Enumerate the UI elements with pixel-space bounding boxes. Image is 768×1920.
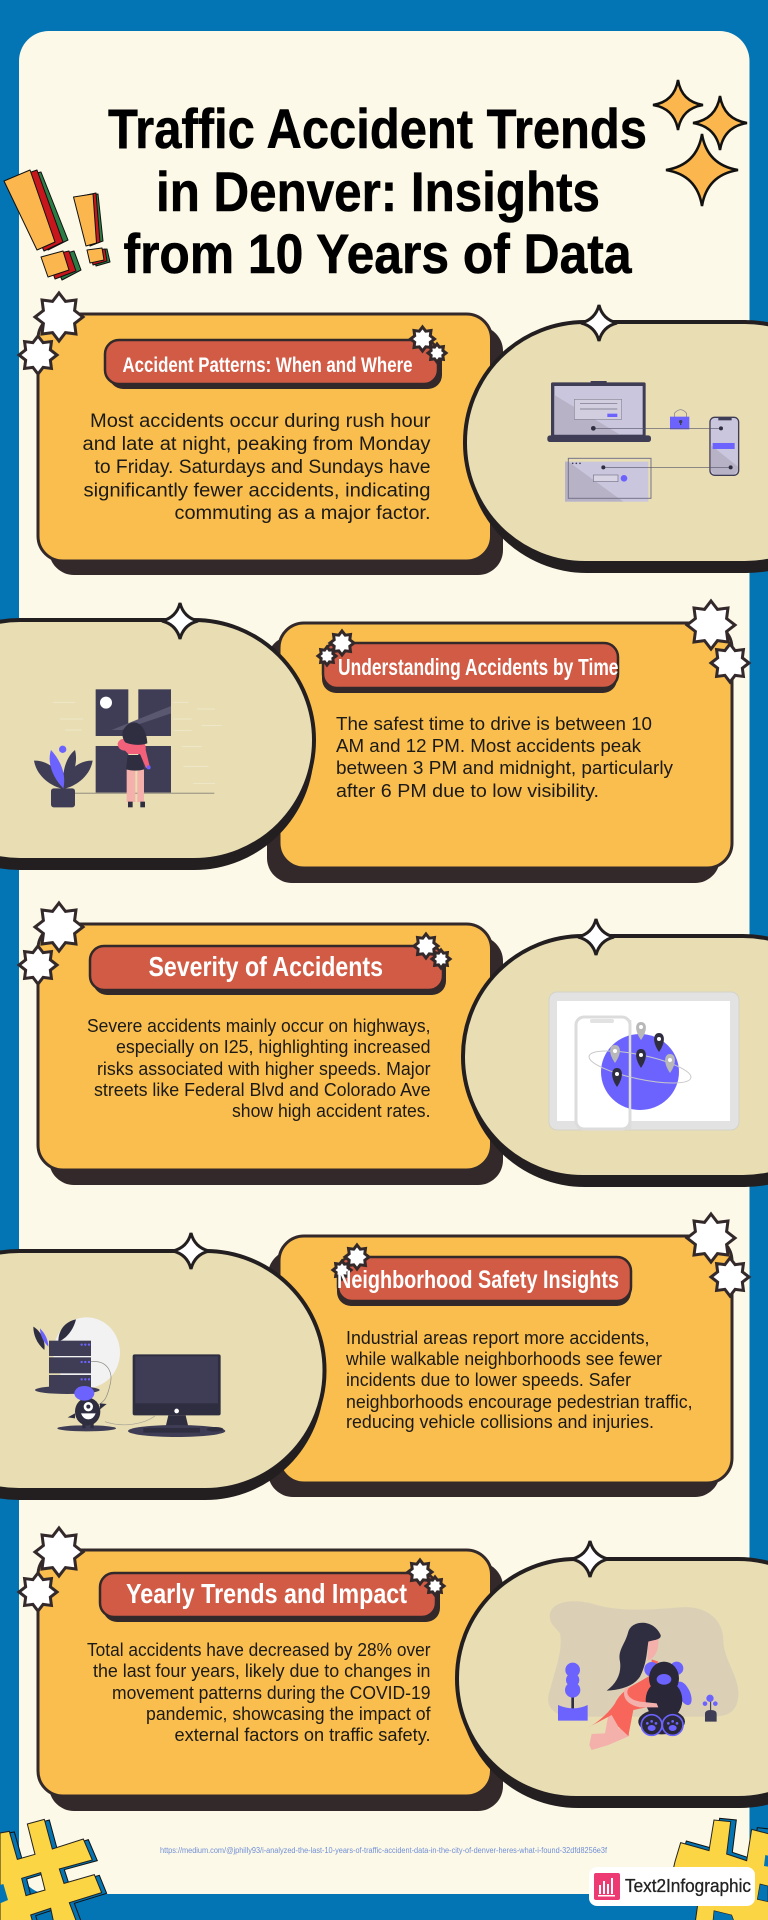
illustration: woman at window with plant [34, 689, 222, 807]
title [108, 97, 647, 285]
panel: yearly trends and impact: external factors on traffic safety. [174, 1725, 430, 1745]
illustration: devices and lock [547, 381, 739, 502]
icon: orange sparkle stars [653, 80, 747, 206]
panel: understanding accidents by time: after 6 PM due to low visibility. [336, 780, 599, 801]
panel: understanding accidents by time: Understanding Accidents by Time [338, 654, 618, 680]
panel: understanding accidents by time: The safest time to drive is between 10 [336, 713, 652, 734]
panel: accident patterns [19, 293, 768, 575]
panel: severity of accidents: Severe accidents mainly occur on highways, [87, 1016, 430, 1036]
panel: yearly trends and impact: movement patterns during the COVID-19 [112, 1683, 430, 1703]
panel: neighborhood safety insights: Neighborhood Safety Insights [337, 1266, 619, 1294]
panel: severity of accidents: risks associated with higher speeds. Major [97, 1059, 430, 1079]
panel: neighborhood safety insights: reducing vehicle collisions and injuries. [346, 1412, 654, 1432]
panel: neighborhood safety insights: incidents due to lower speeds. Safer [346, 1370, 631, 1390]
panel: severity of accidents: show high accident rates. [232, 1101, 430, 1121]
panel: accident patterns: to Friday. Saturdays and Sundays have [94, 457, 431, 478]
panel: understanding accidents by time: between 3 PM and midnight, particularly [336, 757, 674, 778]
panel: understanding accidents by time: AM and 12 PM. Most accidents peak [336, 735, 642, 756]
title: in Denver: Insights [156, 160, 600, 223]
panel: neighborhood safety insights [0, 1214, 749, 1500]
hash decoration left [0, 1819, 107, 1920]
panel: neighborhood safety insights: Industrial areas report more accidents, [346, 1328, 650, 1348]
title: from 10 Years of Data [124, 222, 632, 285]
panel: understanding accidents by time [0, 601, 749, 883]
panel: yearly trends and impact: Total accidents have decreased by 28% over [87, 1640, 431, 1660]
panel: accident patterns: Most accidents occur during rush hour [90, 411, 431, 432]
logo: Text2Infographic [589, 1867, 755, 1906]
title: Traffic Accident Trends [108, 97, 647, 160]
panel: accident patterns: Accident Patterns: When and Where [122, 354, 412, 377]
source link: https://medium.com/@jphilly93/i-analyzed-the-last-10-years-of-traffic-accident-data-in-the-city-of-denver-heres-what-i-found-32dfd8256e3f [160, 1846, 608, 1855]
panel: severity of accidents: especially on I25, highlighting increased [116, 1037, 430, 1057]
illustration: server, monitor and creature [33, 1317, 225, 1437]
panel: yearly trends and impact: Yearly Trends and Impact [126, 1578, 407, 1609]
panel: yearly trends and impact: the last four years, likely due to changes in [93, 1661, 430, 1681]
icon: exclamation marks [4, 170, 110, 280]
hash decoration right [670, 1818, 768, 1920]
panel: severity of accidents: streets like Federal Blvd and Colorado Ave [94, 1080, 430, 1100]
panel: yearly trends and impact: pandemic, showcasing the impact of [146, 1704, 431, 1724]
illustration: tablet, phone and globe with pins [549, 992, 739, 1130]
panel: accident patterns: significantly fewer accidents, indicating [84, 480, 430, 502]
panel: yearly trends and impact [19, 1528, 768, 1811]
panel: accident patterns: and late at night, peaking from Monday [82, 434, 431, 455]
logo: Text2Infographic: Text2Infographic [625, 1876, 751, 1896]
panel: severity of accidents [19, 903, 768, 1187]
panel: neighborhood safety insights: while walkable neighborhoods see fewer [345, 1349, 662, 1369]
panel: severity of accidents: Severity of Accidents [148, 951, 383, 982]
panel: accident patterns: commuting as a major factor. [174, 503, 430, 524]
illustration: woman with teddy bear [548, 1601, 738, 1750]
panel: neighborhood safety insights: neighborhoods encourage pedestrian traffic, [346, 1392, 692, 1412]
